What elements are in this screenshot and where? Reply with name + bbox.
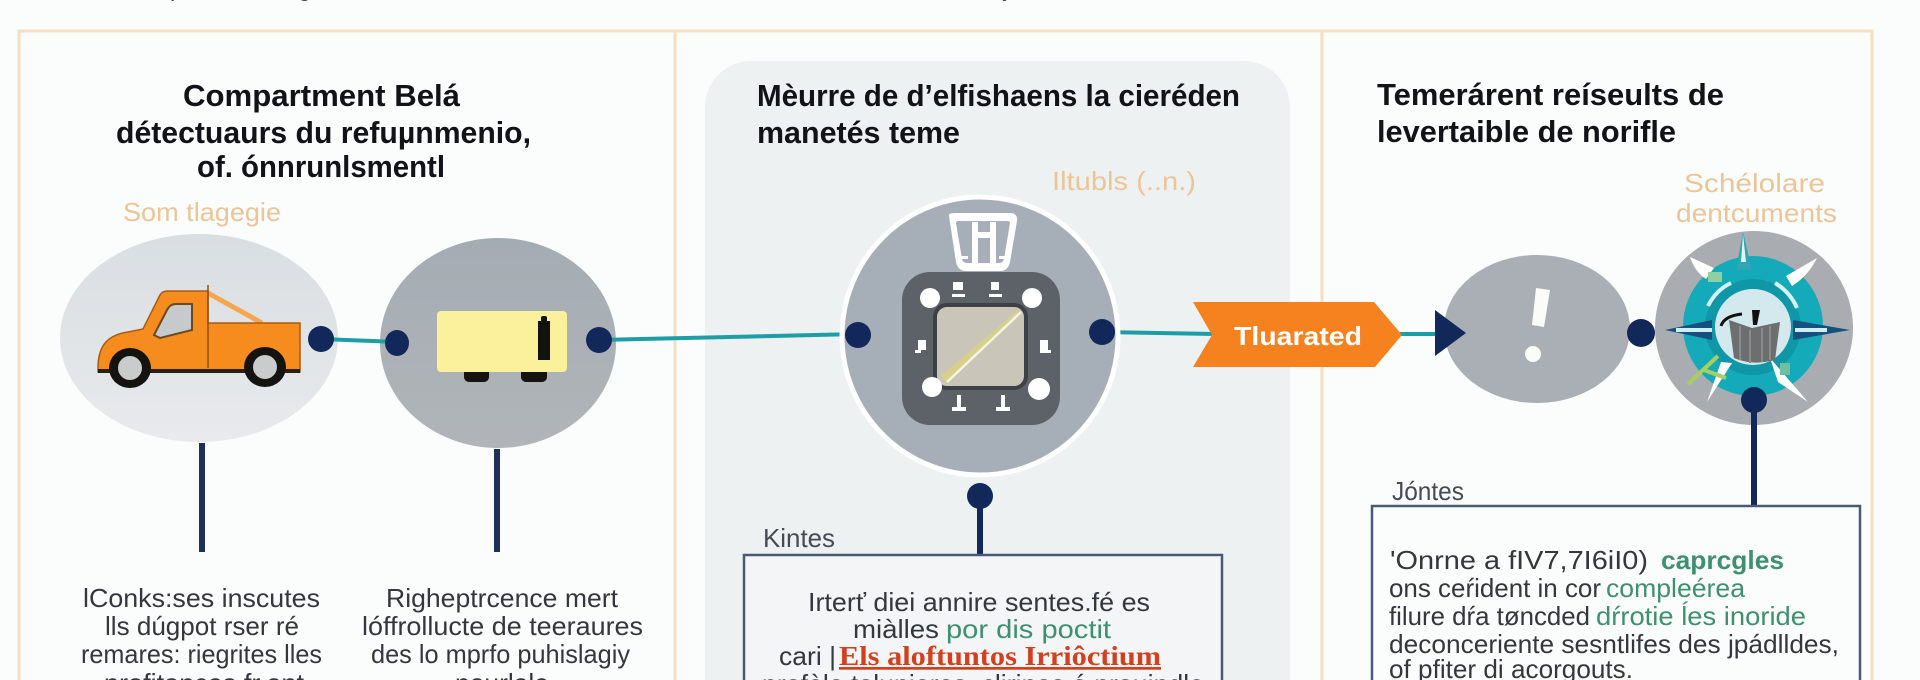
dots on the left column [308,326,612,356]
stem: left text [199,443,205,552]
text: middle notes: por dis poctit [946,614,1112,644]
connector: teal line, second segment [599,334,858,340]
dots on the compass [1627,319,1767,413]
connector: teal line, first segment [321,339,397,342]
text: right notes: deconceriente sesntlifes des jpádlldes, [1389,629,1839,659]
text: middle notes: miàlles [853,614,939,644]
text: left column description: lls dúgpot rser ré [105,611,299,641]
text: left column description: remares: riegrites lles [81,639,322,669]
label: Kintes: Kintes [763,523,835,553]
text: middle notes: Irterť diei annire sentes.fé es [808,587,1150,617]
arrow: orange label [1193,302,1402,367]
text: right notes: dŕrotie ĺes inoride [1596,601,1806,631]
icon: yellow battery box [437,311,567,382]
circle: exclamation alert [1444,255,1630,403]
box: right notes [1372,506,1860,680]
heading: middle column: Mèurre de d’elfishaens la cieréden [757,78,1240,113]
stem: central box [977,500,983,556]
text: second description [362,583,643,680]
clipped top line of text [30,0,1014,2]
heading: right column: levertaible de norifle [1377,114,1676,149]
icon: orange pickup truck [98,285,300,388]
label: right column orange [1676,168,1837,228]
arrowhead: navy triangle [1435,310,1466,356]
heading: left column: Compartment Belá [183,78,461,113]
heading: middle column [757,78,1240,150]
label: left column orange: Som tlagegie [123,197,281,227]
text: middle notes: Els aloftuntos Irriôctium [839,641,1162,671]
panel: middle grey background [705,61,1290,680]
heading: right column: Temerárent reíseults de [1377,77,1724,112]
icon: compass badge [1655,231,1853,425]
heading: left column: détectuaurs du refuµnmenio, [116,115,531,150]
text: second description: lóffrollucte de teeraures [362,611,643,641]
label: Jóntes: Jóntes [1392,476,1464,506]
circle: central device [842,197,1118,475]
heading: left column [116,78,531,184]
heading: right column [1377,77,1724,149]
circle: battery background [380,238,616,448]
heading: middle column: manetés teme [757,115,960,150]
arrow: orange label: Tluarated [1234,321,1362,351]
text: right notes: filure dŕa tøncded [1389,601,1590,631]
text: right notes: ons ceŕident in cor [1389,573,1601,603]
dots around the central device [845,319,1115,509]
text: right notes: compleérea [1606,573,1746,603]
icon: central gauge [902,213,1060,425]
connector: teal line, fourth segment [1400,332,1445,336]
text: right notes [1389,545,1839,680]
label: right column orange: dentcuments [1676,198,1837,228]
stem: second text [494,449,500,552]
text: left column description: lConks:ses inscutes [83,583,320,613]
text: right notes: 'Onrne a fIV7,7I6iI0) [1390,545,1648,575]
circle: truck background [60,234,338,442]
label: right column orange: Schélolare [1684,168,1825,198]
text: right notes: caprcgles [1661,545,1784,575]
stem: right box [1751,405,1757,506]
label: middle column orange: Iltubls (..n.) [1052,166,1196,196]
connector: teal line, third segment [1102,332,1215,334]
text: left column description [81,583,322,680]
text: second description: Righeptrcence mert [386,583,619,613]
text: second description: des lo mprfo puhislagiy [371,639,630,669]
box: middle notes [744,555,1222,680]
text: middle notes: cari | [779,641,836,671]
text: middle notes [762,587,1204,680]
heading: left column: of. ónnrunlsmentl [197,149,445,184]
